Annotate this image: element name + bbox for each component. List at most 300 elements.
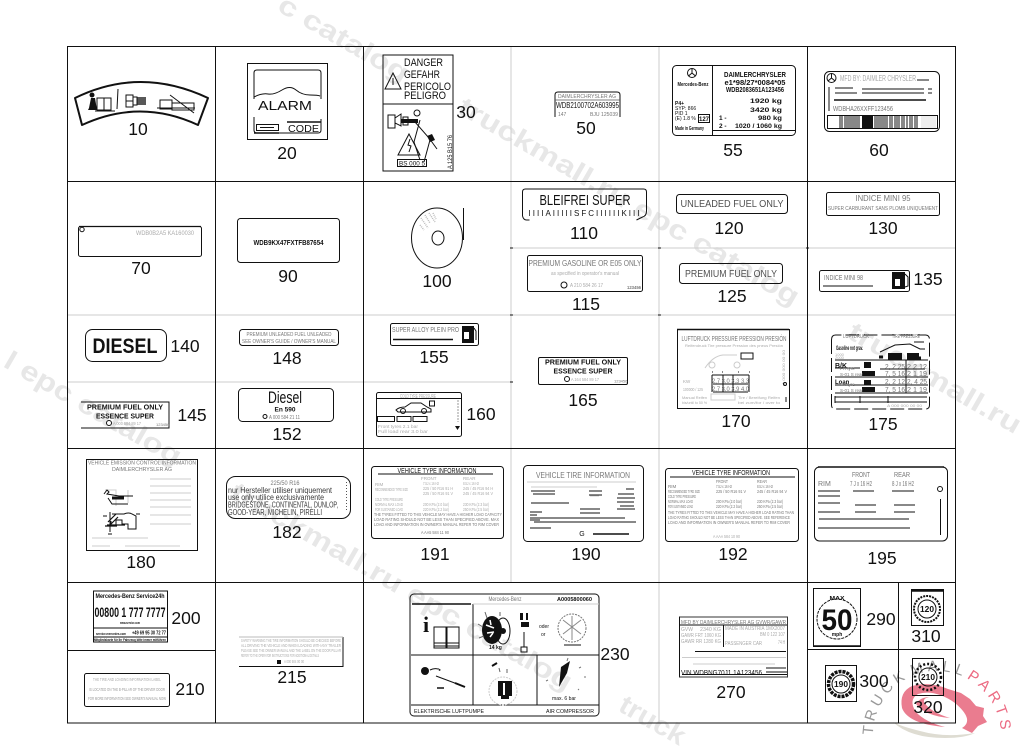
watermark text: truckmall.ru (843, 316, 1024, 440)
label 230: tyre inflation pictogram card: A0005800060 (557, 597, 592, 603)
label 130: Indice Mini 95 sticker: SUPER CARBURANT SANS PLOMB UNIQUEMENT (828, 206, 939, 212)
panel: label 115 (528, 256, 642, 314)
panel: label 310 (911, 590, 944, 646)
label 30: danger warning sticker: PERICOLO (404, 81, 451, 93)
panel: label 170 (677, 330, 790, 431)
panel: label 195 (814, 467, 948, 568)
part number 170: 170 (721, 411, 751, 431)
label 110: Bleifrei Super sticker: IIIIAIIIIISFCIIIIIIKIII (528, 209, 640, 218)
label 200: service phone card: www.service.com (119, 621, 140, 625)
label 50: VIN plate: DAIMLERCHRYSLER AG (558, 94, 616, 100)
label 182: approved tyre makers sticker: 225/50 R16 (270, 480, 300, 487)
label 170: tyre pressure placard: bei zum/for / over to (738, 400, 781, 405)
label 180: emission control information: DAIMLERCHRYSLER AG (112, 467, 172, 473)
label 195: rim size sticker (814, 467, 948, 541)
label 200: service phone card: +49 69 95 30 72 77 (132, 630, 166, 636)
label 55: DaimlerChrysler weight plate: 1020 / 1060 kg (735, 123, 782, 130)
label 290: 50 mph limit sticker: MAX (830, 596, 845, 602)
label 170: tyre pressure placard (677, 330, 790, 408)
icon: wheel: 14 kg (489, 645, 502, 651)
label 192: vehicle tyre information: NORMAL MAX LOAD (668, 499, 693, 504)
icon: hose (421, 667, 465, 688)
label 170: tyre pressure placard: KW (683, 379, 691, 384)
panel: label 120 (676, 194, 788, 238)
label 170: tyre pressure placard: 100000 / 125 (683, 387, 703, 392)
label 170: tyre pressure placard: Tire / Bereifung Reifen (738, 395, 780, 400)
label 175: tyre pressure table: S-01 S rear (840, 388, 864, 393)
icon: compressor (489, 663, 517, 705)
panel: label 152 (238, 388, 334, 444)
label 120: Unleaded Fuel Only sticker: UNLEADED FUEL ONLY (680, 198, 784, 210)
part number 290: 290 (866, 609, 896, 629)
label 191: vehicle type information: 245 / 45 R16 94 V (463, 491, 493, 496)
part number 50: 50 (576, 118, 596, 138)
label 192: vehicle tyre information: THE TYRES FITTED TO THIS VEHICLE MAY HAVE A HIGHER LOAD RATING THAN (668, 510, 794, 515)
part number 160: 160 (466, 404, 496, 424)
label 165: Premium Fuel Only Essence Super sticker: ESSENCE SUPER (554, 368, 612, 376)
panel: label 300 (826, 666, 889, 702)
part number 20: 20 (277, 143, 297, 163)
label 55: DaimlerChrysler weight plate: P4+ (675, 101, 684, 107)
label 310: 120 speed disc: 120 (920, 605, 935, 614)
label 55: DaimlerChrysler weight plate: e1*98/27*0084*05 (724, 80, 786, 87)
label 290: 50 mph limit sticker: mph (832, 632, 842, 638)
label 230: tyre inflation pictogram card: Mercedes-Benz (488, 597, 522, 603)
panel: label 50 (555, 92, 620, 138)
panel: label 192 (666, 468, 798, 564)
label 175: tyre pressure table: B/K (835, 363, 847, 370)
panel: label 125 (680, 264, 782, 306)
label 165: Premium Fuel Only Essence Super sticker: A 164 584 89 17 (571, 377, 599, 382)
label 175: tyre pressure table: 2, 2 12 (885, 379, 905, 386)
part number 210: 210 (175, 679, 205, 699)
label 190: vehicle tire information: VEHICLE TIRE INFORMATION (536, 471, 630, 480)
label 192: vehicle tyre information: 8.5J x 16 H2 (757, 484, 773, 489)
label 270: VIN weight plate (680, 617, 788, 677)
panel: label 60 (824, 72, 940, 160)
label 60: barcode manufacturer plate (824, 72, 940, 132)
label 55: DaimlerChrysler weight plate: 3420 kg (750, 107, 782, 114)
label 230: tyre inflation pictogram card: AIR COMPRESSOR (546, 709, 594, 715)
panel: label 290 (813, 588, 896, 646)
panel: label 110 (522, 189, 646, 243)
label 175: tyre pressure table: 2 2 12 (907, 364, 927, 371)
label 215: text strip plate (239, 637, 343, 666)
label 145: Premium Fuel Only Essence Super sticker (81, 402, 170, 428)
label 130: Indice Mini 95 sticker (826, 192, 940, 216)
part number 215: 215 (277, 667, 307, 687)
watermark text: truck (614, 689, 692, 750)
panel: label 180 (86, 460, 198, 572)
label 10: curved pictogram sticker (75, 82, 208, 125)
label 192: vehicle tyre information: 7.5J x 16 H2 (716, 484, 732, 489)
label 152: Diesel En 590 sticker (238, 388, 334, 422)
label 192: vehicle tyre information: REAR (757, 479, 768, 484)
label 148: two line premium fuel strip: SEE OWNER'S GUIDE / OWNER'S MANUAL (242, 339, 336, 345)
label 192: vehicle tyre information: VEHICLE TYRE INFORMATION (692, 470, 770, 477)
label 180: emission control information: VEHICLE EMISSION CONTROL INFORMATION (88, 460, 196, 466)
part number 148: 148 (272, 348, 302, 368)
label 192: vehicle tyre information: 230 KPa (2.3 bar) (757, 499, 783, 504)
label 191: vehicle type information: 230 KPa (2.3 bar) (463, 502, 489, 507)
part number 230: 230 (600, 644, 630, 664)
part number 182: 182 (272, 522, 302, 542)
label 165: Premium Fuel Only Essence Super sticker (538, 358, 628, 384)
label 30: danger warning sticker: BS 000 5 (399, 162, 426, 168)
label 270: VIN weight plate: MADE IN AUSTRIA 1MX2007 (725, 626, 785, 632)
label 180: emission control information (86, 460, 198, 550)
label 60: barcode manufacturer plate: MFD BY: DAIMLER CHRYSLER (840, 74, 916, 83)
part number 125: 125 (717, 286, 747, 306)
label 55: DaimlerChrysler weight plate: 127 (699, 117, 710, 123)
label 130: Indice Mini 95 sticker: INDICE MINI 95 (856, 194, 911, 203)
label 200: service phone card: 00800 1 777 7777 (94, 604, 166, 620)
label 175: tyre pressure table: LUFTDRUCK (843, 334, 870, 340)
panel: label 270 (680, 617, 788, 702)
label 70: small VIN strip: WDB0B2A5 KA160030 (136, 230, 194, 237)
part number 190: 190 (571, 544, 601, 564)
label 215: text strip plate: PLEASE SEE THE OWNER MANUAL AND THE LABEL ON THE DOOR PILLAR (241, 648, 341, 653)
label 20: alarm code card (248, 64, 328, 140)
label 195: rim size sticker: RIM (818, 481, 831, 488)
label 192: vehicle tyre information: FOR SUSTAINED LOAD (668, 504, 693, 509)
panel: label 70 (78, 226, 202, 278)
part number 270: 270 (716, 682, 746, 702)
label 290: 50 mph limit sticker (813, 588, 861, 646)
label 175: tyre pressure table: 2000 (835, 355, 845, 360)
label 20: alarm code card: CODE (288, 124, 319, 135)
label 270: VIN weight plate: BM 0 122 107 (760, 632, 785, 638)
label 175: tyre pressure table: S-01 S rear (840, 372, 864, 377)
icon: exclamation and gauge: oder (539, 624, 549, 630)
label 145: Premium Fuel Only Essence Super sticker: 123456 (156, 422, 170, 427)
label 170: tyre pressure placard: Manual Reifen (682, 395, 707, 400)
watermark text: l epc catalog (0, 345, 187, 471)
label 192: vehicle tyre information: LOAD RATING SHOULD NOT BE LESS THAN SPECIFIED ABOVE. SEE REFERENCE (668, 515, 790, 520)
label 210: three line text plate: THE TIRE AND LOADING INFORMATION LABEL (93, 677, 161, 682)
part number 191: 191 (420, 544, 450, 564)
logo: Truck Mall Parts: TRUCKMALLPARTS (862, 660, 1011, 734)
label 175: tyre pressure table: FR tyre (840, 382, 855, 387)
label 195: rim size sticker: REAR (894, 472, 910, 479)
label 20: alarm code card: ALARM (258, 98, 312, 113)
label 182: approved tyre makers sticker: GOOD-YEAR, MICHELIN, PIRELLI (228, 508, 322, 517)
panel: label 160 (376, 392, 496, 436)
label 191: vehicle type information: VEHICLE TYPE INFORMATION (398, 468, 476, 475)
label 90: VIN plate: WDB9KX47FXTFB87654 (254, 240, 324, 247)
label 55: DaimlerChrysler weight plate (672, 66, 796, 136)
label 175: tyre pressure table: 2, 4 25 (907, 379, 927, 386)
label 192: vehicle tyre information: FRONT (716, 479, 728, 484)
label 270: VIN weight plate: GAWR RR 1280 KG (681, 639, 721, 645)
label 182: approved tyre makers sticker: BRIDGESTONE, CONTINENTAL, DUNLOP, (228, 500, 338, 510)
panel: label 155 (390, 324, 478, 367)
label 200: service phone card (94, 591, 168, 642)
label 192: vehicle tyre information: 250 KPa (2.5 bar) (757, 504, 783, 509)
part number 30: 30 (456, 102, 476, 122)
label 182: approved tyre makers sticker: nur Hersteller utiliser uniquement (228, 486, 333, 495)
panel: label 30 (383, 55, 476, 171)
panel: label 90 (238, 218, 340, 286)
label 175: tyre pressure table: 1000 (835, 352, 845, 357)
label 192: vehicle tyre information: 225 / 50 R16 91 V (716, 489, 746, 494)
label 175: tyre pressure table: 2 1 19 (907, 387, 927, 394)
label 215: text strip plate: SAFETY WARNING THE TIRE INFORMATION SHOULD BE CHECKED BEFORE (241, 638, 341, 643)
label 55: DaimlerChrysler weight plate: (E) 1.8 % (675, 116, 696, 122)
part number 310: 310 (911, 626, 941, 646)
label 191: vehicle type information: RECOMMENDED TYRE SIZE (375, 487, 408, 492)
part number 140: 140 (170, 336, 200, 356)
label 192: vehicle tyre information: RECOMMENDED TYRE SIZE (668, 489, 700, 494)
label 110: Bleifrei Super sticker: BLEIFREI SUPER (540, 192, 631, 209)
label 140: Diesel sticker: DIESEL (92, 335, 158, 358)
label 110: Bleifrei Super sticker (522, 189, 646, 220)
label 191: vehicle type information: COLD TYRE PRESSURE (375, 497, 403, 502)
panel: label 10 (75, 82, 208, 139)
label 50: VIN plate: WDB2100702A603995 (556, 101, 619, 110)
label 191: vehicle type information: LOAD AND INFORMATION IN OWNER'S MANUAL REFER TO RIM COVER (374, 522, 499, 527)
panel: label 210 (84, 674, 205, 706)
label 192: vehicle tyre information: A AAA 584 10 90 (713, 534, 740, 539)
panel: label 320 (912, 658, 944, 717)
label 270: VIN weight plate: GVW (681, 627, 693, 633)
label 195: rim size sticker: 7 J x 16 H2 (850, 481, 872, 488)
part number 70: 70 (131, 258, 151, 278)
label 191: vehicle type information: 225 / 50 R16 91 H (423, 486, 453, 491)
label 115: premium gasoline sticker: 123456 (627, 285, 641, 290)
label 182: approved tyre makers sticker (226, 476, 350, 518)
label 270: VIN weight plate: GAWR FRT 1060 KG (681, 633, 721, 639)
label 190: vehicle tire information: G (579, 531, 585, 538)
label 145: Premium Fuel Only Essence Super sticker: PREMIUM FUEL ONLY (87, 404, 163, 412)
label 175: tyre pressure table (832, 334, 930, 409)
label 175: tyre pressure table: 2 1 19 (907, 371, 927, 378)
label 191: vehicle type information: FRONT (421, 476, 437, 481)
label 160: cold tyre pressure sticker: Front tyres 2.1 bar (378, 424, 419, 429)
label 175: tyre pressure table: 7, 5 16 (885, 387, 905, 394)
label 160: cold tyre pressure sticker: Full load rear 3.0 bar (378, 429, 429, 434)
label 191: vehicle type information: 245 / 45 R16 94 H (463, 486, 493, 491)
label 170: tyre pressure placard: bis/until to 50 % (682, 400, 707, 405)
panel: label 100 (412, 208, 464, 291)
icon: wheel (478, 612, 510, 651)
panel: label 55 (672, 66, 796, 160)
label 210: three line text plate (84, 674, 170, 706)
label 210: three line text plate: FOR MORE INFORMATION SEE OWNER'S MANUAL NOW (88, 696, 166, 701)
label 192: vehicle tyre information (666, 468, 798, 542)
part number 152: 152 (272, 424, 302, 444)
label 191: vehicle type information: RIM (375, 482, 384, 487)
label 215: text strip plate: A 000 584 00 00 (284, 659, 304, 664)
label 270: VIN weight plate: MFD BY DAIMLERCHRYSLER AG GVWR/GAWR (681, 620, 786, 626)
label 115: premium gasoline sticker (528, 256, 642, 292)
part number 195: 195 (867, 548, 897, 568)
label 115: premium gasoline sticker: A 210 584 26 17 (570, 283, 603, 289)
label 270: VIN weight plate: PASSENGER CAR (725, 641, 762, 647)
panel: label 20 (248, 64, 328, 163)
part number 110: 110 (570, 223, 598, 243)
watermark text: truckmall.ru epc catalog (453, 91, 805, 312)
label 30: danger warning sticker (383, 55, 454, 171)
panel: label 140 (86, 330, 200, 362)
label 55: DaimlerChrysler weight plate: DAIMLERCHRYSLER (724, 72, 786, 79)
icon: information book: i (423, 612, 429, 637)
label 195: rim size sticker: 8 J x 16 H2 (892, 481, 914, 488)
label 191: vehicle type information: 200 KPa (2.0 bar) (423, 502, 449, 507)
label 165: Premium Fuel Only Essence Super sticker: PREMIUM FUEL ONLY (545, 360, 621, 366)
label 175: tyre pressure table: Loan (835, 380, 850, 386)
label 192: vehicle tyre information: RIM (668, 484, 676, 489)
label 55: DaimlerChrysler weight plate: PID 1 (675, 111, 688, 117)
label 55: DaimlerChrysler weight plate: Mercedes-Benz (678, 82, 709, 88)
label 270: VIN weight plate: VIN WDBNG70J1 1A123456 (681, 670, 762, 677)
label 191: vehicle type information: 225 / 50 R16 91 V (423, 491, 453, 496)
label 175: tyre pressure table: A 000 000 00 00 (887, 403, 923, 408)
label 160: cold tyre pressure sticker: COLD TYRE PRESSURE (400, 394, 436, 400)
label 145: Premium Fuel Only Essence Super sticker: A 000 584 89 17 (113, 421, 141, 426)
panel: label 182 (226, 476, 350, 542)
label 191: vehicle type information: A AA5 584 11 90 (421, 530, 450, 535)
part number 10: 10 (128, 119, 148, 139)
label 191: vehicle type information: LOAD RATING SHOULD NOT BE LESS THAN SPECIFIED ABOVE. MAX (374, 517, 499, 522)
panel: label 145 (81, 402, 207, 428)
label 175: tyre pressure table: Gasoline not grav. (836, 346, 863, 352)
label 192: vehicle tyre information: 200 KPa (2.0 bar) (716, 499, 742, 504)
icon: information book (423, 612, 459, 648)
part number 145: 145 (177, 405, 207, 425)
icon: exclamation and gauge (520, 613, 586, 652)
label 152: Diesel En 590 sticker: En 590 (275, 406, 296, 414)
label 215: text strip plate: REFER TO THE OPERATOR INSTRUCTIONS FOR ADDITIONAL DETAILS (241, 653, 319, 658)
label 191: vehicle type information (372, 466, 504, 538)
label 200: service phone card: service.mercedes.com (96, 631, 126, 636)
label 160: cold tyre pressure sticker (376, 392, 462, 436)
part number 175: 175 (868, 414, 898, 434)
label 270: VIN weight plate: 2340 KG (700, 627, 721, 633)
label 215: text strip plate: ALL DRIVING THE VEHICLE AND WHEN LOADING WITH ANY TRAILER (241, 643, 341, 648)
panel: label 200 (94, 591, 201, 642)
label 55: DaimlerChrysler weight plate: SYP: 866 (675, 106, 696, 112)
label 175: tyre pressure table: FR tyre (840, 366, 855, 371)
part number 200: 200 (171, 608, 201, 628)
label 148: two line premium fuel strip (240, 330, 338, 346)
label 300: 190 speed disc: 190 (834, 680, 849, 689)
label 191: vehicle type information: FOR SUSTAINED LOAD (375, 507, 403, 512)
label 55: DaimlerChrysler weight plate: WDB2083651A123456 (726, 87, 784, 94)
label 170: tyre pressure placard: A 000 000 00 00 (781, 349, 786, 385)
label 210: three line text plate: IS LOCATED ON THE B-PILLAR OF THE DRIVER DOOR (89, 687, 165, 692)
label 115: premium gasoline sticker: as specified in operator's manual (551, 271, 619, 277)
panel: label 130 (826, 192, 940, 238)
label 152: Diesel En 590 sticker: Diesel (268, 388, 302, 407)
icon: exclamation and gauge: or (541, 632, 546, 638)
label 170: tyre pressure placard: 2,7 3,0 3,3 3,3 (712, 378, 749, 385)
icon: pressure dial: max. 6 bar (552, 696, 576, 702)
label 148: two line premium fuel strip: PREMIUM UNLEADED FUEL UNLEADED (246, 332, 332, 338)
label 270: VIN weight plate: 74 H (778, 640, 785, 646)
part number 55: 55 (723, 140, 743, 160)
part number 320: 320 (913, 697, 943, 717)
panel: label 135 (820, 269, 943, 292)
label 192: vehicle tyre information: 245 / 45 R16 94 V (757, 489, 787, 494)
label 155: super fuel strip: SUPER ALLOY PLEIN PRO (392, 327, 459, 334)
label 192: vehicle tyre information: LOAD AND INFORMATION IN OWNER'S MANUAL REFER TO RIM COVER (668, 520, 791, 525)
label 115: premium gasoline sticker: PREMIUM GASOLINE OR E05 ONLY (528, 259, 642, 268)
label 191: vehicle type information: REAR (463, 476, 476, 481)
label 170: tyre pressure placard: Reifendruck Tire pressure Pression des pneus Presión (685, 343, 783, 348)
part number 100: 100 (422, 271, 452, 291)
label 152: Diesel En 590 sticker: A 000 584 21 11 (269, 415, 300, 421)
label 191: vehicle type information: 7.5J x 16 H2 (423, 481, 439, 486)
label 50: VIN plate: BJU 125039 (590, 112, 618, 118)
part number 130: 130 (868, 218, 898, 238)
label 192: vehicle tyre information: 220 KPa (2.2 bar) (716, 504, 742, 509)
part number 115: 115 (572, 294, 600, 314)
panel: label 215 (239, 637, 343, 687)
label 135: Indice Mini 98 sticker: INDICE MINI 98 (824, 273, 863, 282)
label 191: vehicle type information: 220 KPa (2.2 bar) (423, 507, 449, 512)
label 170: tyre pressure placard: LUFTDRUCK PRESSURE PRESSION PRESIÓN (682, 334, 786, 343)
label 55: DaimlerChrysler weight plate: 1920 kg (750, 98, 782, 105)
label 175: tyre pressure table: TIRE PRESSURE (892, 334, 920, 340)
label 55: DaimlerChrysler weight plate: 2 - (719, 123, 727, 130)
label 191: vehicle type information: 250 KPa (2.5 bar) (463, 507, 489, 512)
part number 155: 155 (419, 347, 449, 367)
label 230: tyre inflation pictogram card (410, 594, 599, 716)
part number 165: 165 (568, 390, 598, 410)
label 175: tyre pressure table: 7, 5 16 (885, 371, 905, 378)
label 190: vehicle tire information (524, 466, 644, 542)
panel: label 230 (410, 594, 630, 716)
panel: label 165 (538, 358, 628, 410)
label 55: DaimlerChrysler weight plate: 980 kg (758, 115, 782, 122)
panel: label 190 (524, 466, 644, 564)
label 195: rim size sticker: FRONT (852, 472, 871, 479)
label 182: approved tyre makers sticker: use only utilice exclusivamente (228, 493, 324, 502)
label 200: service phone card: Mitgliedskarte für Ihr Fahrzeug bitte immer mitführen (94, 637, 166, 642)
label 290: 50 mph limit sticker: 50 (822, 604, 852, 637)
part number 192: 192 (718, 544, 748, 564)
label 50: VIN plate: 147 (558, 112, 567, 118)
panel: label 191 (372, 466, 504, 564)
panel: label 175 (832, 334, 930, 434)
icon: pressure dial (546, 658, 586, 702)
label 100: round disc tag (412, 208, 464, 268)
label 191: vehicle type information: 8.5J x 16 H2 (463, 481, 479, 486)
label 230: tyre inflation pictogram card: ELEKTRISCHE LUFTPUMPE (414, 709, 484, 715)
part number 300: 300 (859, 671, 889, 691)
part number 90: 90 (278, 266, 298, 286)
panel: label 148 (240, 330, 338, 368)
label 175: tyre pressure table: 2, 2 25 (885, 364, 905, 371)
label 145: Premium Fuel Only Essence Super sticker: ESSENCE SUPER (96, 414, 154, 420)
label 60: barcode manufacturer plate: WDBHA26XXFF123456 (833, 106, 893, 113)
part number 60: 60 (869, 140, 889, 160)
label 125: Premium Fuel Only sticker: PREMIUM FUEL ONLY (685, 268, 777, 280)
label 55: DaimlerChrysler weight plate: 1 - (719, 115, 727, 122)
label 165: Premium Fuel Only Essence Super sticker: 123456 (614, 378, 628, 384)
label 30: danger warning sticker: GEFAHR (404, 69, 440, 81)
part number 180: 180 (126, 552, 156, 572)
label 30: danger warning sticker: A 125 B15 76 (448, 134, 454, 169)
label 191: vehicle type information: THE TYRES FITTED TO THIS VEHICLE MAY HAVE A HIGHER LOAD CAPACITY (374, 512, 502, 517)
label 192: vehicle tyre information: COLD TYRE PRESSURE (668, 494, 696, 499)
label 191: vehicle type information: NORMAL MAX LOAD (375, 502, 403, 507)
label 170: tyre pressure placard: 2,7 3,0 3,9 4,0 (712, 386, 749, 393)
label 50: VIN plate (555, 92, 620, 118)
label 55: DaimlerChrysler weight plate: Made in Germany (675, 126, 704, 132)
label 320: 210 speed disc: 210 (921, 673, 936, 682)
